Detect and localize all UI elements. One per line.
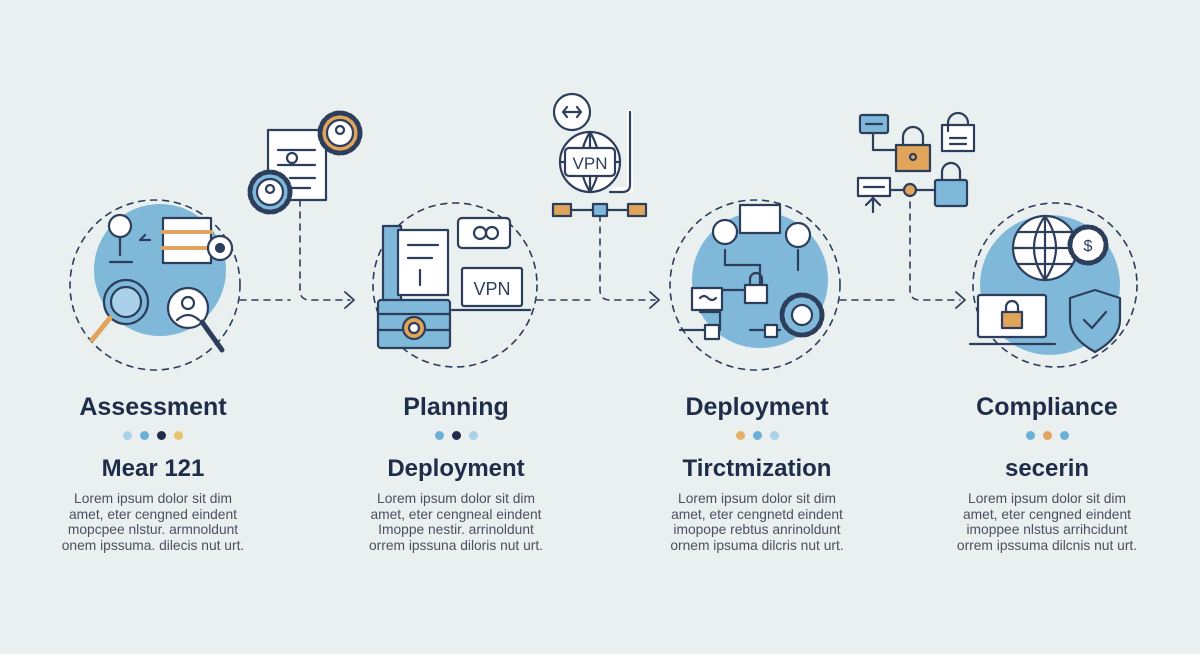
step 1 icon circle — [70, 200, 240, 370]
step 3 text: amet, eter cengnetd eindent — [671, 506, 843, 522]
step 1 text: Lorem ipsum dolor sit dim — [74, 491, 232, 506]
step 1 text — [62, 393, 244, 553]
step 1 top icons — [250, 113, 360, 212]
step 4 text: Compliance — [976, 393, 1118, 421]
step 2 top icons — [553, 94, 646, 216]
step 2 icon circle — [373, 203, 537, 367]
step 4 text: Lorem ipsum dolor sit dim — [968, 491, 1126, 506]
step 4 text: secerin — [1005, 455, 1089, 482]
step 3 text: Deployment — [685, 393, 829, 421]
step 1 text: Mear 121 — [102, 455, 204, 482]
step 2 text — [369, 393, 543, 553]
step 2 text: amet, eter cengneal eindent — [370, 506, 542, 522]
step 2 top icons: VPN — [573, 154, 607, 173]
step 2 text: orrem ipssuna diloris nut urt. — [369, 538, 543, 552]
step 3 text — [670, 393, 844, 553]
step 4 text: amet, eter cengned eindent — [963, 506, 1131, 522]
step 2 text: Planning — [403, 393, 509, 421]
step 1 text: amet, eter cengned eindent — [69, 506, 237, 522]
step 3 text: imopope rebtus anrinoldunt — [673, 522, 841, 537]
step 3 top icons — [858, 113, 974, 212]
step 3 text: Lorem ipsum dolor sit dim — [678, 491, 836, 506]
connector arrows — [240, 190, 960, 300]
step 4 icon circle: $ — [1084, 238, 1093, 255]
step 4 icon circle — [970, 203, 1137, 367]
step 1 text: mopcpee nlstur. armnoldunt — [68, 522, 238, 537]
step 4 text: orrem ipssuma dilcnis nut urt. — [957, 538, 1137, 552]
step 2 text: Lorem ipsum dolor sit dim — [377, 491, 535, 506]
step 2 text: Deployment — [387, 455, 525, 482]
step 3 icon circle — [670, 200, 840, 370]
step 4 text — [957, 393, 1137, 553]
step 1 text: onem ipssuma. dilecis nut urt. — [62, 538, 244, 552]
step 3 text: Tirctmization — [683, 455, 831, 482]
step 2 icon circle: VPN — [473, 279, 511, 299]
step 1 text: Assessment — [79, 393, 227, 421]
step 3 text: ornem ipsuma dilcris nut urt. — [670, 538, 844, 552]
step 2 text: Imoppe nestir. arrinoldunt — [378, 522, 534, 537]
step 4 text: imoppee nlstus arrihcidunt — [966, 522, 1128, 537]
